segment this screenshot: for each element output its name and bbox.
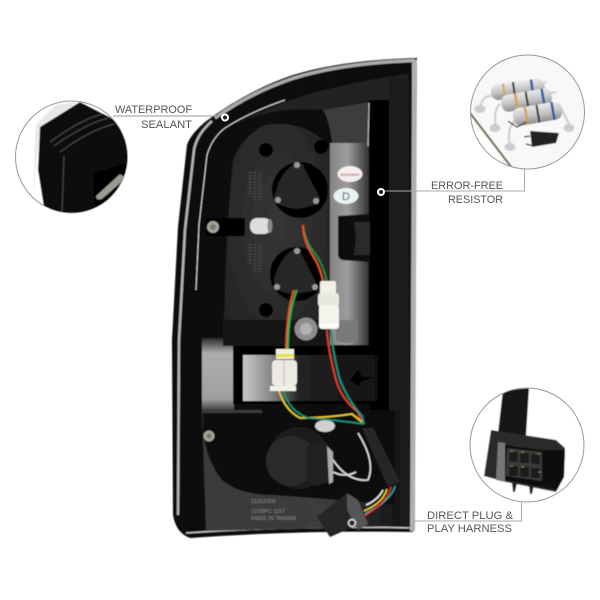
mounting hole top right [314,140,328,154]
lower bottom plate [202,410,400,531]
sticker text: WARNING [340,172,360,177]
lower middle dark area [262,410,395,505]
label text: ERROR-FREE [431,180,503,192]
detail circle: sealant [15,100,128,214]
upper black recess [223,320,330,346]
white bulb base peek [315,420,335,432]
right rim stripe [412,60,414,531]
D sticker [334,188,358,204]
lower left black recess [203,413,272,495]
callout line [413,502,522,521]
left light strip [202,338,234,414]
left rim stripe [178,121,212,515]
callout line [384,168,524,191]
black centre strip [370,100,389,526]
detail circle: resistors [470,54,585,170]
label second line: PLAY HARNESS [427,523,512,535]
label text: DIRECT PLUG & [427,510,513,522]
bracket and bolt [206,218,245,236]
lower wire connector [270,349,297,391]
bulb socket [266,427,333,489]
callout: direct plug and play harness [413,385,590,535]
wires to plug [364,486,395,516]
mounting hole lower [259,303,273,317]
mounting hole top left [259,143,273,157]
D letter: D [342,191,350,203]
harness plug [317,493,368,537]
clip slot [338,214,370,262]
callout line [113,115,222,117]
callout: waterproof sealant [15,100,229,214]
molded text patches [250,172,260,272]
detail circle: harness plug [470,388,584,502]
label second line: SEALANT [141,119,192,131]
label text: WATERPROOF [115,104,192,116]
inner housing highlight [196,100,285,290]
large grey bolt [294,318,318,340]
molded part text: 111E2300 [251,499,275,505]
red sticker [338,166,362,182]
molded part text: 1D35PC 1157 [251,509,285,515]
clip [354,222,370,255]
lamp housing body [172,58,417,538]
upper right wedge [323,102,368,145]
upper socket [272,162,328,218]
tail lamp rear view [172,58,417,538]
marker dot [222,114,228,120]
bottom rim stripe [186,527,412,533]
molded part text [251,499,296,522]
lower socket [270,247,324,301]
infographic canvas [15,54,585,539]
dark mounting plate [223,124,330,345]
callout: error-free resistor [378,50,590,206]
white cylinder peg [250,218,272,234]
upper wires red and green [286,225,364,424]
grey boss right [336,320,358,343]
yellow and teal wires [279,391,364,424]
marker dot [378,189,384,195]
top shoulder shading [225,74,408,132]
middle recess frame [233,346,383,404]
silver reflector panel [330,143,369,345]
white bulb wires [333,433,370,480]
molded part text: MADE IN TAIWAN [251,516,296,522]
top rim stripe [215,60,415,118]
upper wire connector [318,281,339,329]
harness sleeve [362,428,400,487]
label second line: RESISTOR [448,194,503,206]
lower bolt [204,430,214,442]
reflector edge highlight [368,103,369,146]
retainer clip [350,370,375,386]
middle recess panel [243,355,378,401]
right channel [389,78,409,526]
